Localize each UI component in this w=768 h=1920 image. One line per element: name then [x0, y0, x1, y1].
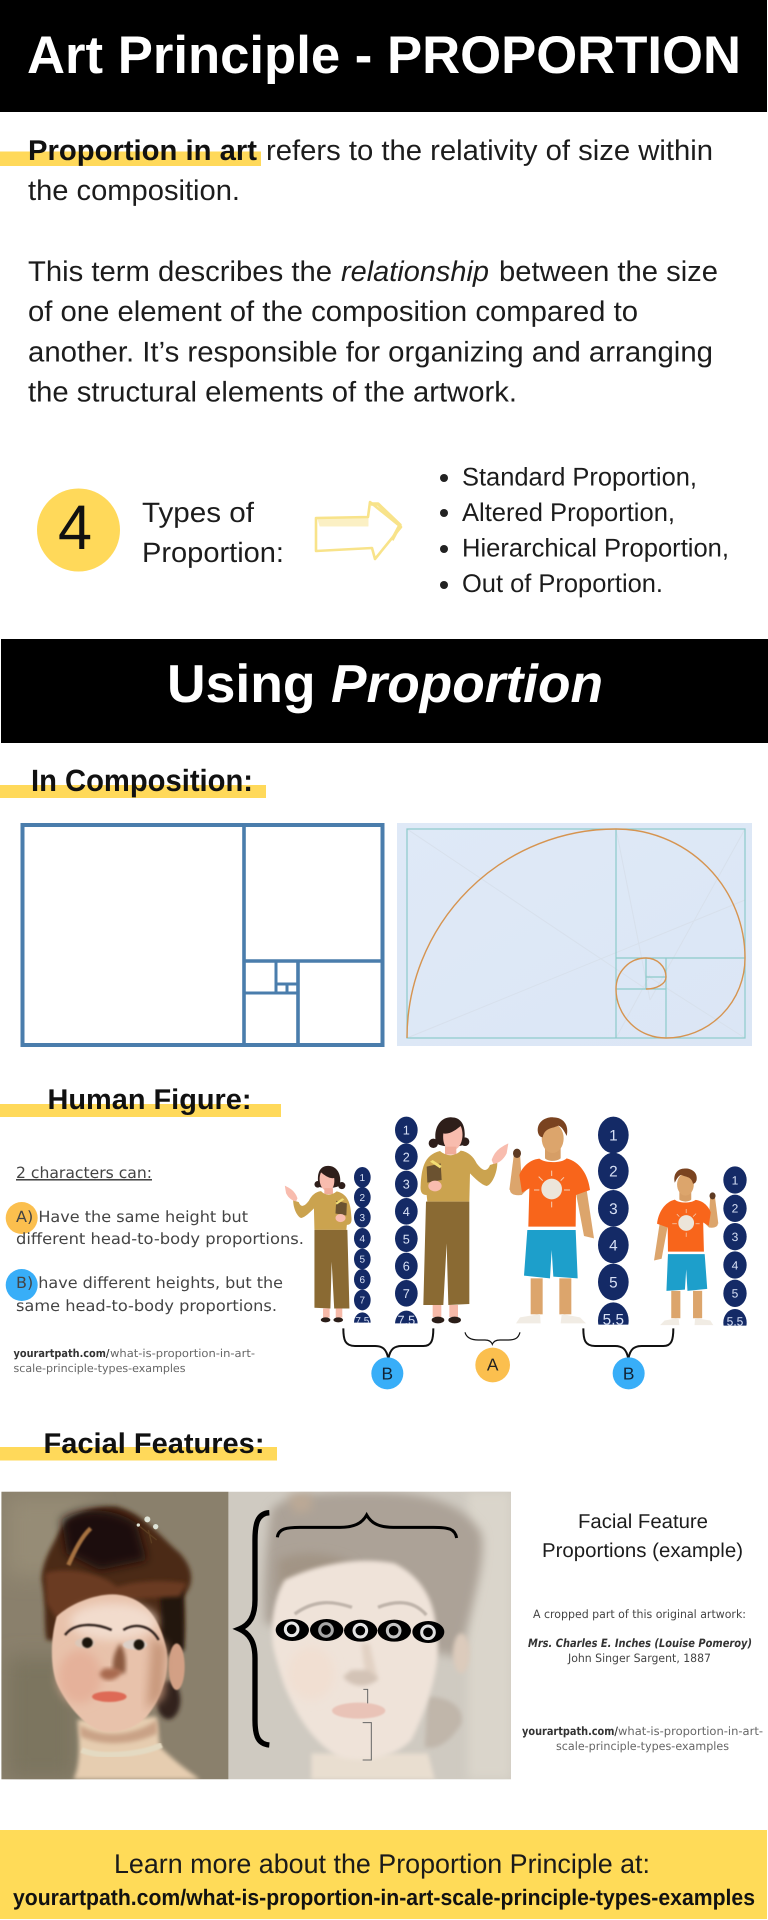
caption: artwork credit: A cropped part of this original artwork:: [533, 1607, 746, 1621]
head scale: small woman: 6: [360, 1274, 365, 1285]
caption: facial feature proportions: Facial Feature: [578, 1511, 708, 1533]
section banner: using proportion: Proportion: [331, 655, 603, 714]
brace and badge: A: [465, 1332, 520, 1382]
source link: facial features: what-is-proportion-in-art-: [618, 1724, 763, 1738]
head scale: small woman: 4: [360, 1233, 365, 1244]
head scale: small man: 3: [732, 1230, 738, 1244]
heading: human figure: [0, 1084, 281, 1117]
text block: 2 characters can: same head-to-body proportions.: [16, 1297, 277, 1315]
intro text block: Proportion in art: [28, 135, 258, 167]
footer call to action: Learn more about the Proportion Principle at:: [114, 1849, 650, 1879]
annotations on faded portrait: [239, 1513, 457, 1760]
head scale: tall woman: 7.5: [398, 1314, 415, 1328]
painting: faded portrait close-up with annotations: [229, 1492, 511, 1779]
intro text block: This term describes the: [28, 256, 332, 288]
intro text block: another. It’s responsible for organizing and arranging: [28, 336, 713, 368]
head scale: tall man: 5.5: [603, 1310, 624, 1328]
head scale: small woman: 7.5: [355, 1315, 369, 1326]
head scale: tall woman: 6: [403, 1260, 410, 1274]
caption: facial feature proportions: [542, 1511, 743, 1562]
brace and badge: B left: [343, 1328, 433, 1389]
head scale: small woman: 2: [360, 1192, 365, 1203]
head scale: tall man: 2: [609, 1163, 618, 1180]
source link: human figure: what-is-proportion-in-art-: [110, 1347, 255, 1360]
list of proportion types: Standard Proportion,: [462, 464, 697, 492]
list of proportion types: Altered Proportion,: [462, 499, 675, 527]
section banner: using proportion: Using: [167, 655, 316, 714]
marker A: [6, 1202, 38, 1234]
title banner: [0, 0, 767, 112]
footer call to action: [0, 1830, 767, 1919]
head scale: tall man: 3: [609, 1200, 618, 1217]
head scale: small woman: 5: [360, 1254, 365, 1265]
source link: human figure: yourartpath.com/: [14, 1347, 110, 1360]
tall woman figure: [421, 1117, 508, 1323]
icon: hand-drawn arrow: [316, 502, 401, 559]
annotation: horizontal brace: [277, 1515, 457, 1538]
heading: facial features: Facial Features:: [44, 1428, 264, 1460]
head scale: small woman: 1: [360, 1172, 365, 1183]
intro text block: of one element of the composition compared to: [28, 296, 638, 328]
list of proportion types: Out of Proportion.: [462, 570, 663, 598]
head scale: tall man: 1: [609, 1127, 618, 1144]
heading: in composition: In Composition:: [31, 763, 253, 798]
text block: 2 characters can: different head-to-body proportions.: [16, 1230, 304, 1248]
head scale: tall woman: 4: [403, 1205, 410, 1219]
intro text block: between the size: [499, 256, 718, 288]
diagram: fibonacci spiral: [397, 823, 752, 1046]
head scale: tall man: 5: [609, 1274, 618, 1291]
list of proportion types: Hierarchical Proportion,: [462, 534, 729, 562]
brace and badge: B right: B: [623, 1364, 634, 1383]
annotation: vertical brace: [239, 1513, 269, 1745]
head scale: tall woman: 1: [403, 1124, 410, 1138]
number badge: 4 types: [37, 488, 120, 572]
head scale: small woman: [354, 1167, 371, 1333]
head scale: small woman: 3: [360, 1212, 365, 1223]
head scale: tall woman: 2: [403, 1150, 410, 1164]
caption: artwork credit: [528, 1607, 752, 1665]
head scale: tall man: [598, 1117, 629, 1339]
text block: 2 characters can: [6, 1164, 304, 1315]
marker B: [6, 1269, 38, 1301]
source link: human figure: [14, 1347, 255, 1375]
small woman figure: [285, 1166, 352, 1322]
head scale: small man: 5.5: [727, 1314, 743, 1328]
head scale: small man: 5: [732, 1287, 738, 1300]
annotation: five eye widths: [276, 1619, 444, 1643]
intro text block: [0, 135, 718, 408]
brace and badge: B left: B: [382, 1364, 393, 1383]
head scale: tall woman: 3: [403, 1178, 410, 1192]
head scale: tall man: 4: [609, 1237, 618, 1254]
intro text block: relationship: [341, 256, 489, 288]
caption: facial feature proportions: Proportions (example): [542, 1540, 743, 1562]
head scale: tall woman: 5: [403, 1232, 410, 1246]
brace and badge: B right: [583, 1328, 673, 1389]
label: types of proportion: Types of: [142, 497, 254, 528]
intro text block: refers to the relativity of size within: [266, 135, 713, 167]
caption: artwork credit: John Singer Sargent, 1887: [567, 1651, 711, 1665]
highlight under key phrase: [0, 152, 261, 166]
small man figure: [654, 1168, 718, 1325]
head scale: small man: 2: [732, 1202, 738, 1215]
intro text block: the structural elements of the artwork.: [28, 376, 517, 408]
label: types of proportion: [142, 497, 284, 568]
head scale: small man: 4: [732, 1258, 738, 1272]
head scale: tall woman: [395, 1117, 418, 1337]
head scale: small man: [723, 1166, 747, 1336]
painting: original portrait crop: [1, 1492, 229, 1779]
text block: 2 characters can: B) have different heights, but the: [16, 1274, 283, 1292]
text block: 2 characters can: 2 characters can:: [16, 1164, 152, 1182]
heading: human figure: Human Figure:: [48, 1084, 252, 1116]
diagram: golden rectangle squares: [22, 825, 382, 1045]
illustration: figures with head-count scales: [285, 1117, 747, 1389]
label: types of proportion: Proportion:: [142, 537, 284, 568]
tall man figure: [509, 1117, 594, 1323]
head scale: small man: 1: [732, 1173, 738, 1187]
source link: facial features: scale-principle-types-examples: [556, 1739, 729, 1753]
annotation: small brackets: [363, 1689, 371, 1760]
source link: human figure: scale-principle-types-examples: [14, 1362, 186, 1375]
title banner: Art Principle - PROPORTION: [27, 26, 741, 85]
head scale: tall woman: 7: [403, 1287, 410, 1301]
text block: 2 characters can: A) Have the same height but: [16, 1208, 248, 1226]
intro text block: the composition.: [28, 175, 240, 207]
section banner: using proportion: [1, 639, 768, 743]
brace and badge: A: A: [487, 1355, 499, 1375]
number badge: 4 types: 4: [58, 493, 92, 563]
source link: facial features: yourartpath.com/: [522, 1724, 619, 1738]
list of proportion types: [440, 464, 729, 598]
head scale: small woman: 7: [360, 1295, 365, 1306]
source link: facial features: [522, 1724, 763, 1753]
